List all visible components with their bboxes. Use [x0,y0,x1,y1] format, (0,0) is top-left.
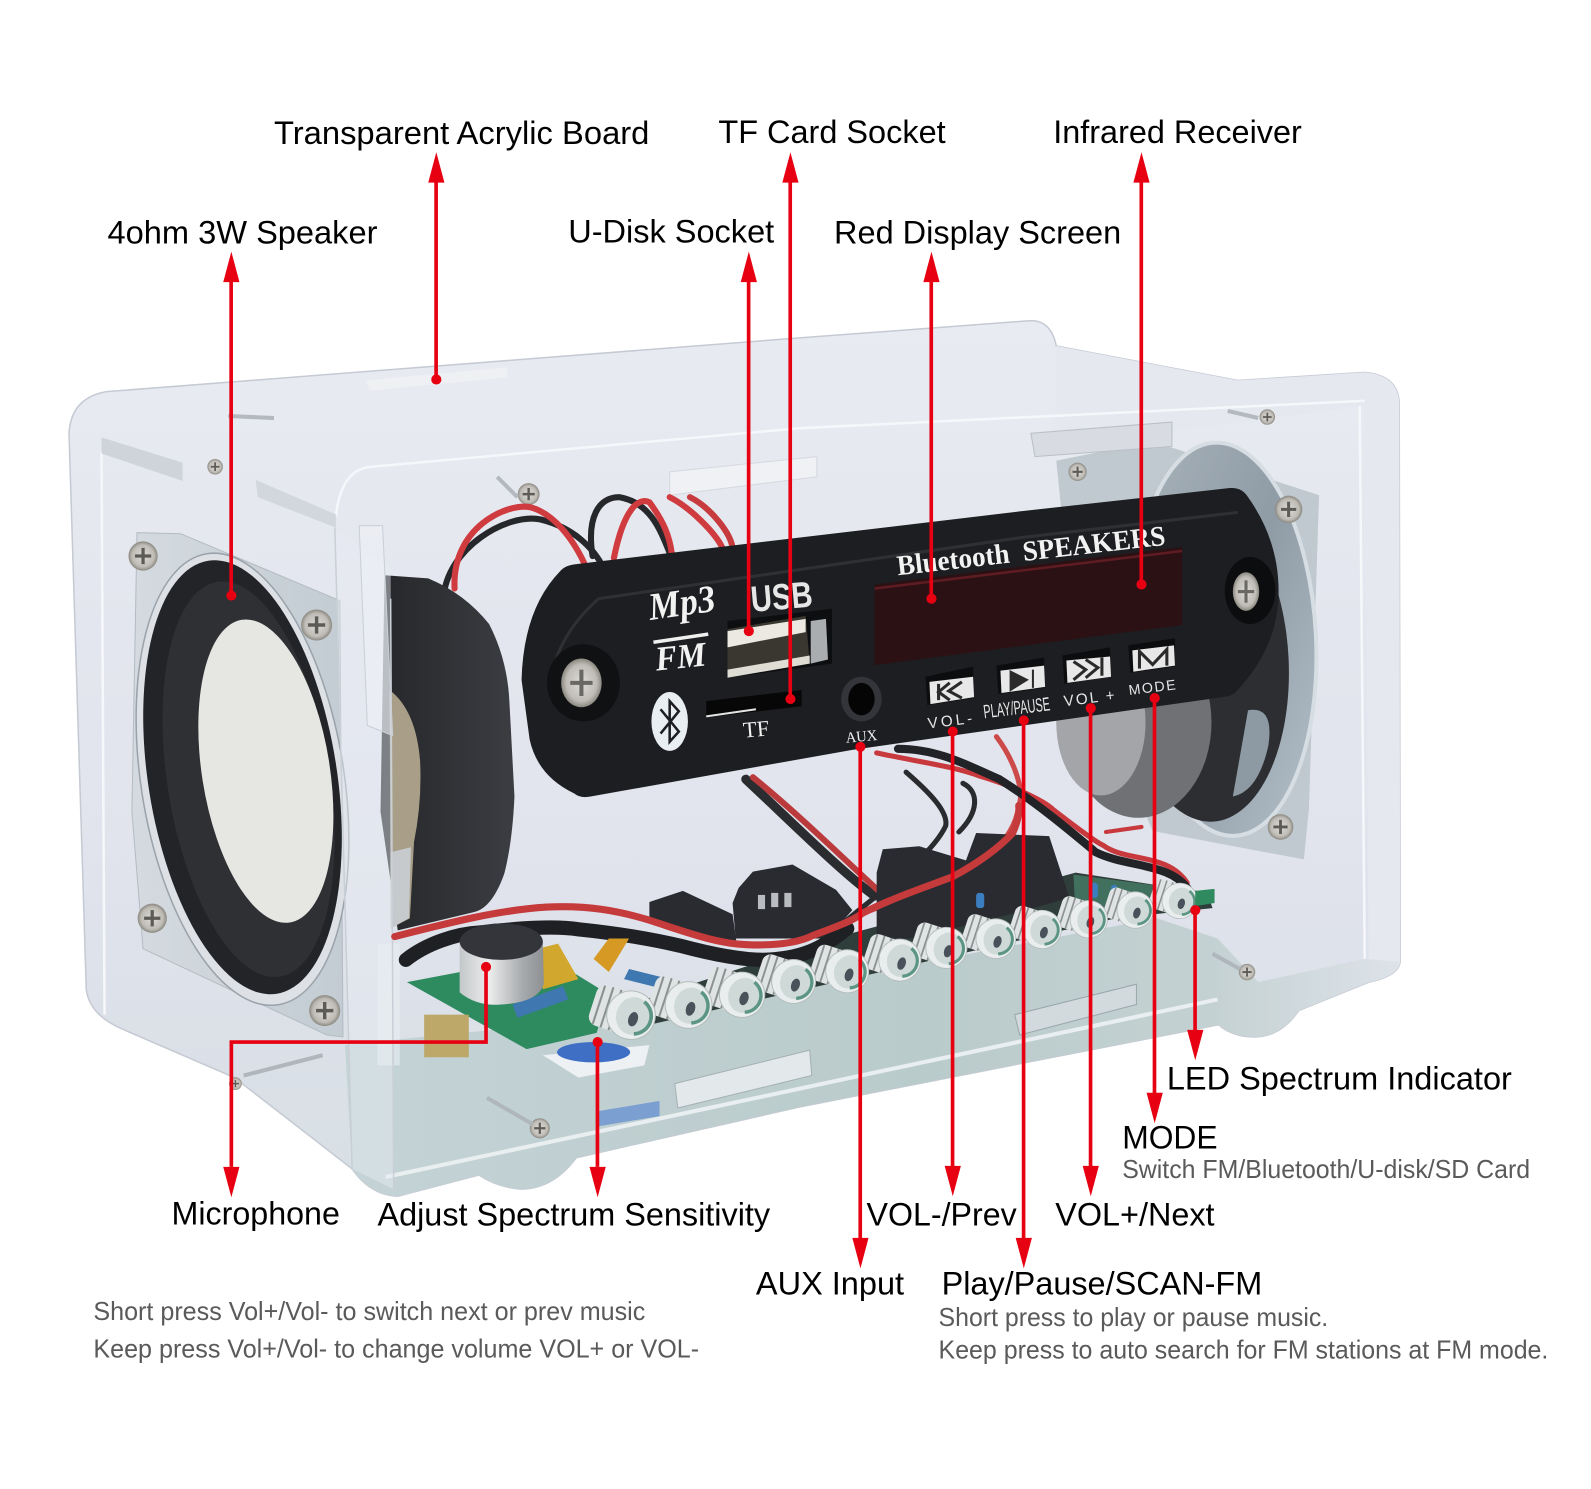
front acrylic corner post [335,526,400,1189]
label: LED Spectrum Indicator: LED Spectrum Indicator [1167,1061,1512,1097]
left speaker rim [107,538,378,1021]
lower wires [746,737,1189,944]
arrow: acrylic board [428,152,444,385]
button VOL+ [1062,647,1111,684]
arrow: LED indicator [1187,905,1203,1060]
arrow: infrared receiver [1133,152,1150,590]
label: Red Display Screen: Red Display Screen [834,215,1121,251]
note: volume long press: Keep press Vol+/Vol- to change volume VOL+ or VOL- [93,1336,699,1364]
arrow: VOL+ next [1083,703,1099,1196]
label: Adjust Spectrum Sensitivity: Adjust Spectrum Sensitivity [377,1197,771,1233]
AUX jack [841,677,882,721]
label: U-Disk Socket: U-Disk Socket [568,214,774,250]
PLAY/PAUSE label: PLAY/PAUSE [982,694,1051,723]
arrow: TF card socket [782,152,799,704]
note: volume short press: Short press Vol+/Vol- to switch next or prev music [93,1298,645,1326]
rear green pcb strip [1074,875,1197,918]
blue capacitors [976,883,1117,908]
button MODE [1128,638,1175,673]
left speaker frame [132,533,343,1037]
brass standoff [424,1015,469,1057]
left panel screw [547,644,620,721]
label: Infrared Receiver: Infrared Receiver [1053,114,1302,150]
button play/pause [996,657,1045,694]
TF card slot [706,690,802,717]
label: Play/Pause/SCAN-FM: Play/Pause/SCAN-FM [942,1266,1262,1302]
tail of LED board [1195,889,1215,906]
arrow: AUX input [852,742,869,1268]
left speaker [107,533,514,1037]
TF label: TF [742,715,770,743]
panel bevel [550,512,1238,690]
top acrylic edges [101,401,1365,1015]
label: Transparent Acrylic Board: Transparent Acrylic Board [274,115,649,151]
arrow: speaker [223,252,239,601]
arrow: VOL- prev [945,726,961,1196]
right speaker magnet [1065,627,1212,818]
right speaker rim [1123,438,1326,841]
note: play pause short press: Short press to play or pause music. [939,1304,1328,1332]
integrated circuit chips [649,833,1069,944]
control panel [522,488,1279,797]
note: MODE function: Switch FM/Bluetooth/U-disk/SD Card [1122,1156,1530,1184]
left speaker dome [179,610,353,932]
MODE label: MODE [1128,677,1178,699]
VOL- label: VOL- [927,710,976,732]
rear circuit board [599,873,1213,1025]
label: VOL+/Next: VOL+/Next [1055,1197,1215,1233]
AUX label: AUX [845,727,878,747]
USB port [728,609,832,678]
callout arrows [223,152,1203,1268]
acrylic right plate inset [1055,346,1400,982]
top small screws [207,409,1275,505]
LED spectrum indicator row [585,875,1202,1046]
arrow: red display [923,252,940,604]
label: TF Card Socket: TF Card Socket [718,114,946,150]
Mp3 logo: Mp3 [645,578,718,629]
bottom screws [229,954,1255,1138]
note: play pause long press: Keep press to auto search for FM stations at FM mode. [939,1337,1548,1365]
arrow: play pause [1016,715,1032,1268]
button VOL- [925,667,974,705]
left speaker rubber surround [115,546,370,1008]
left speaker screws [128,541,340,1026]
right speaker [1056,438,1326,859]
VOL+ label: VOL + [1063,687,1118,710]
label: Microphone: Microphone [171,1196,340,1232]
arrow: mode [1147,693,1163,1123]
floor edge strips [386,984,1218,1177]
right speaker dark cone [1112,497,1297,826]
top acrylic tabs [101,367,1172,528]
capacitors on microphone board [512,939,670,1018]
label: MODE: MODE [1122,1120,1218,1156]
floor acrylic plate [345,918,1400,1196]
product illustration: acrylic speaker kit [69,321,1400,1196]
wires above the control panel [443,497,733,599]
right speaker basket slot [1233,710,1269,797]
panel body [522,488,1279,797]
FM logo: FM [652,635,709,679]
blue sensitivity potentiometer [543,1042,649,1078]
acrylic enclosure silhouette [69,321,1400,1196]
right speaker frame [1056,441,1319,859]
arrow: U-disk socket [741,252,757,636]
USB label: USB [749,574,814,620]
red display screen [875,547,1182,665]
right panel screw [1225,557,1275,624]
microphone board [407,956,609,1049]
logo divider [653,634,708,642]
upper long wires [395,806,1019,960]
panel title: Bluetooth SPEAKERS [895,521,1167,582]
right speaker screws [1068,463,1302,840]
label: AUX Input: AUX Input [756,1266,904,1302]
left speaker magnet [381,575,514,930]
label: 4ohm 3W Speaker: 4ohm 3W Speaker [108,215,378,251]
label: VOL-/Prev: VOL-/Prev [867,1197,1017,1233]
arrow: spectrum sensitivity [590,1037,606,1197]
Bluetooth badge [651,692,688,751]
arrow: microphone [223,962,491,1197]
left speaker basket [390,690,420,928]
microphone capsule [460,923,544,1005]
